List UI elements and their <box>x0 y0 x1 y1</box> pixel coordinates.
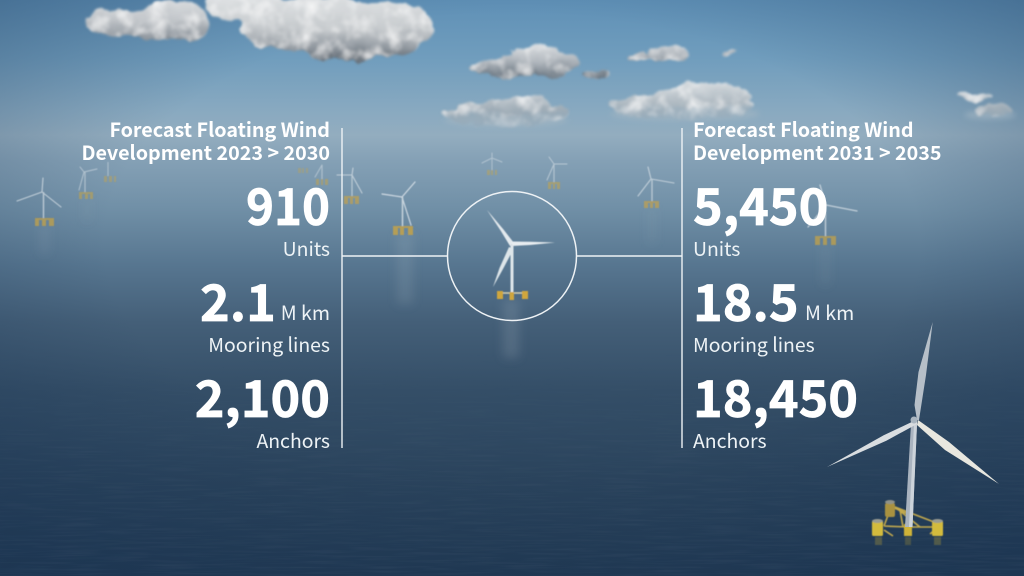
right panel divider <box>681 128 683 448</box>
tower <box>905 424 917 527</box>
heading <box>81 114 330 166</box>
turbine 1 <box>17 178 61 226</box>
stat: anchors: Anchors <box>693 425 767 454</box>
turbine 8 <box>482 153 502 175</box>
clouds: horizon row <box>444 83 1016 127</box>
stat: anchors: 2,100 <box>195 359 330 432</box>
stat: mooring lines: 18.5 <box>693 263 799 336</box>
stat: mooring lines: 2.1 <box>200 263 276 336</box>
left panel divider <box>341 128 343 448</box>
stat: mooring lines <box>200 263 330 358</box>
stat: mooring lines: Mooring lines <box>693 329 815 358</box>
heading: Forecast Floating Wind <box>109 114 330 143</box>
reflections on the water <box>40 198 830 358</box>
heading: Development 2031 > 2035 <box>693 137 942 166</box>
central circle and connectors <box>342 192 682 320</box>
foreground floating turbine <box>827 322 999 545</box>
panel: forecast 2023-2030 <box>81 114 330 454</box>
stat: anchors: 18,450 <box>693 359 858 432</box>
turbine 5 <box>315 165 328 185</box>
stat: mooring lines: M km <box>805 297 854 326</box>
stat: mooring lines: M km <box>281 297 330 326</box>
clouds: upper left <box>85 0 435 61</box>
turbine 11 <box>808 185 857 245</box>
stat: units: Units <box>283 233 330 262</box>
stat: mooring lines <box>693 263 854 358</box>
stat: units: 5,450 <box>693 167 828 240</box>
turbine 4 <box>298 168 308 173</box>
blades <box>914 322 933 420</box>
heading <box>693 114 942 166</box>
stat: units: Units <box>693 233 740 262</box>
turbine 9 <box>547 157 567 189</box>
clouds: middle row <box>470 45 735 78</box>
turbine 3 <box>104 162 116 182</box>
stat: mooring lines: Mooring lines <box>208 329 330 358</box>
turbine 2 <box>79 167 97 199</box>
stat: units: 910 <box>246 167 330 240</box>
heading: Development 2023 > 2030 <box>81 137 330 166</box>
turbine 10 <box>638 167 674 208</box>
stat: anchors: Anchors <box>256 425 330 454</box>
distant turbines <box>17 153 857 245</box>
centre turbine in circle <box>487 210 555 300</box>
heading: Forecast Floating Wind <box>693 114 914 143</box>
panel: forecast 2031-2035 <box>693 114 942 454</box>
turbine 7 <box>382 182 415 235</box>
turbine 6 <box>337 168 362 204</box>
platform <box>872 500 943 545</box>
